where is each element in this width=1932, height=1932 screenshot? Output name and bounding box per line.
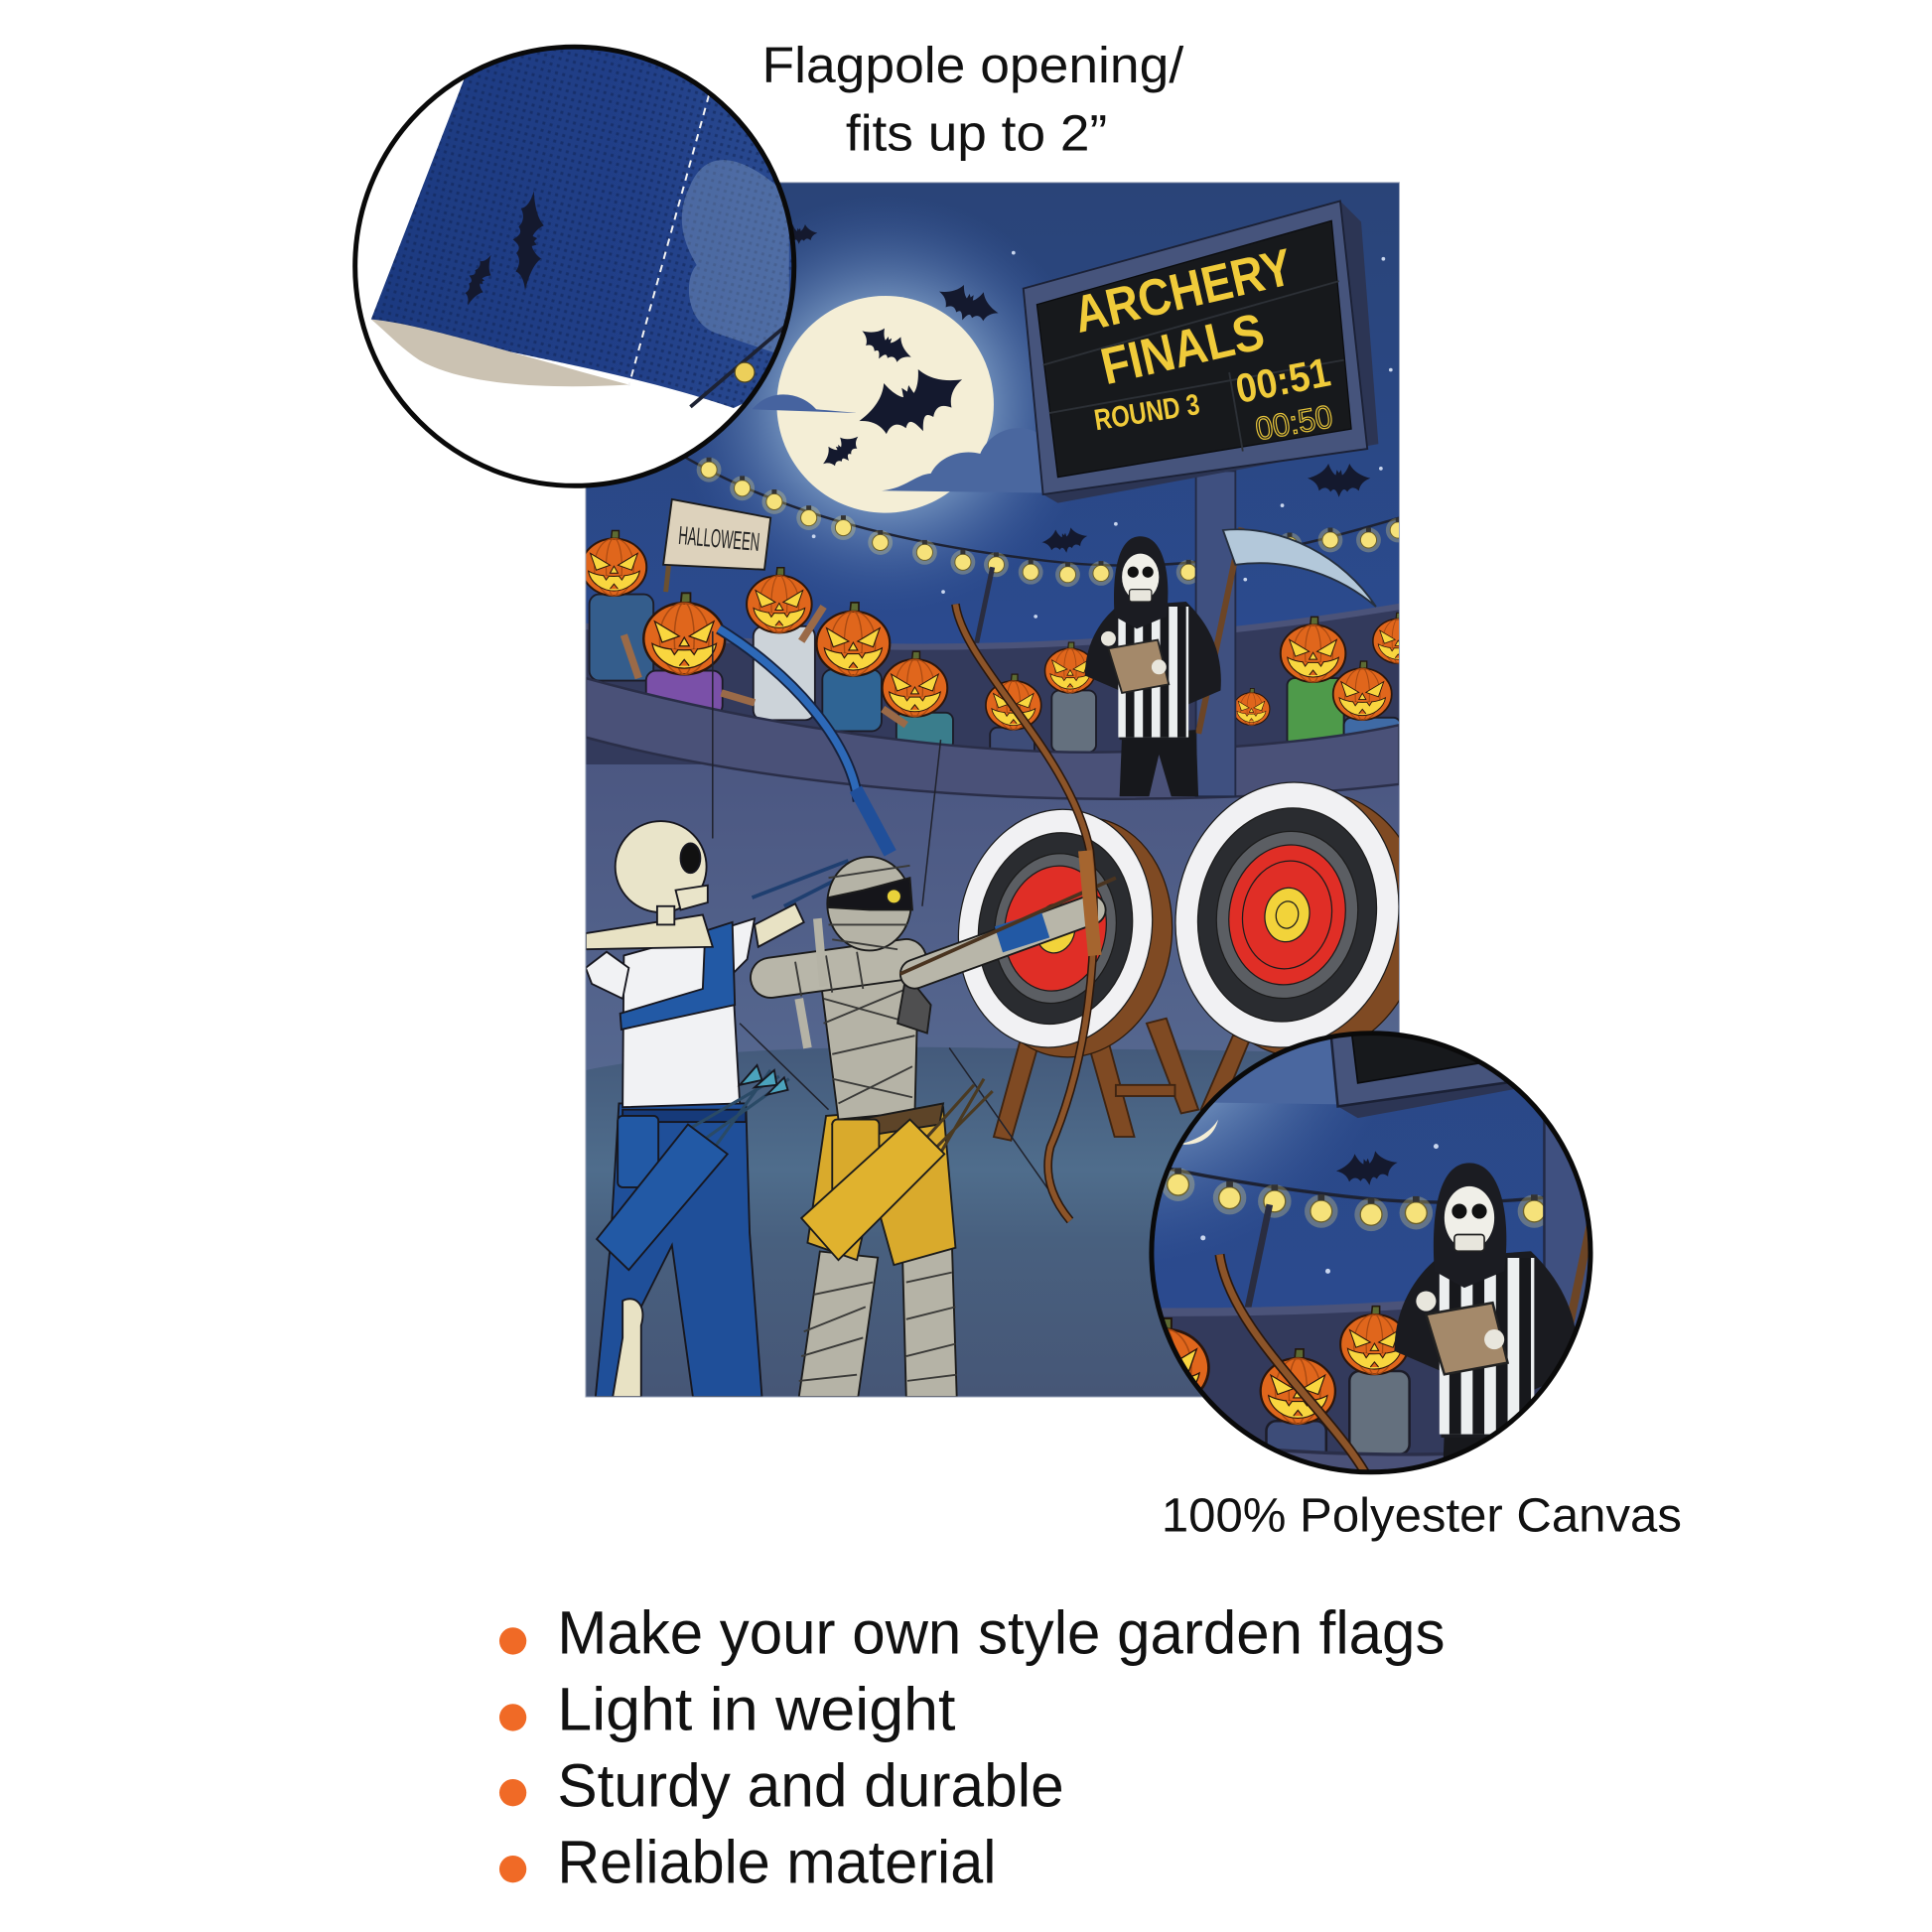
garden flag artwork (582, 183, 1445, 1397)
feature list (499, 1598, 1445, 1895)
bullet 2: Light in weight (557, 1675, 956, 1742)
light string (690, 323, 789, 407)
stars (812, 251, 1393, 619)
canvas close-up circle (1149, 1031, 1592, 1475)
brown recurve bow (955, 605, 1095, 1220)
fabric sleeve (371, 30, 814, 408)
mummy archer (770, 857, 1116, 1397)
full moon (776, 296, 994, 513)
night sky (586, 183, 1400, 750)
balcony band (586, 678, 1400, 799)
upper scene: sky, scoreboard, crowd, referee (582, 183, 1424, 1085)
grim reaper referee (1085, 536, 1221, 796)
zoomed bats (465, 191, 544, 306)
flagpole opening detail circle (355, 30, 814, 485)
scoreboard: 00:50 (1253, 398, 1335, 447)
stand backing (586, 607, 1400, 764)
scoreboard pole (1196, 471, 1235, 796)
scoreboard: ARCHERY (1068, 238, 1298, 345)
flagpole caption second line: fits up to 2” (846, 105, 1107, 162)
scoreboard: ROUND 3 (1092, 388, 1202, 437)
bullet 1: Make your own style garden flags (557, 1598, 1445, 1666)
arena wall (586, 764, 1399, 1070)
material caption: 100% Polyester Canvas (1162, 1488, 1682, 1542)
flag edge (586, 183, 1400, 1397)
targets (957, 781, 1399, 1142)
crowd of pumpkin-head fans (582, 530, 1424, 758)
blue recurve bow (719, 628, 891, 853)
string lights (628, 419, 1411, 587)
clouds (753, 394, 1066, 493)
bullet 4: Reliable material (557, 1828, 996, 1895)
stitching (628, 95, 709, 386)
moon glow (676, 195, 1095, 614)
flagpole caption: Flagpole opening/ (761, 37, 1184, 93)
magnified flag scene (498, 1031, 1592, 1881)
scoreboard: 00:51 (1232, 349, 1334, 412)
bow strings (713, 631, 1070, 1220)
rail (586, 607, 1400, 647)
halloween sign (663, 499, 770, 592)
cloud detail (682, 160, 789, 357)
scoreboard (1024, 201, 1378, 503)
scythe (1198, 528, 1376, 734)
bats (780, 224, 1370, 556)
ground (586, 1046, 1273, 1397)
string bulb (735, 362, 755, 382)
skeleton archer (586, 821, 848, 1397)
light post (977, 567, 993, 643)
fabric weave (371, 50, 792, 408)
moon sliver (1179, 1120, 1218, 1145)
bullet 3: Sturdy and durable (557, 1751, 1064, 1819)
underside of fabric (371, 320, 628, 386)
scoreboard: FINALS (1096, 303, 1270, 396)
halloween sign: HALLOWEEN (677, 520, 760, 557)
